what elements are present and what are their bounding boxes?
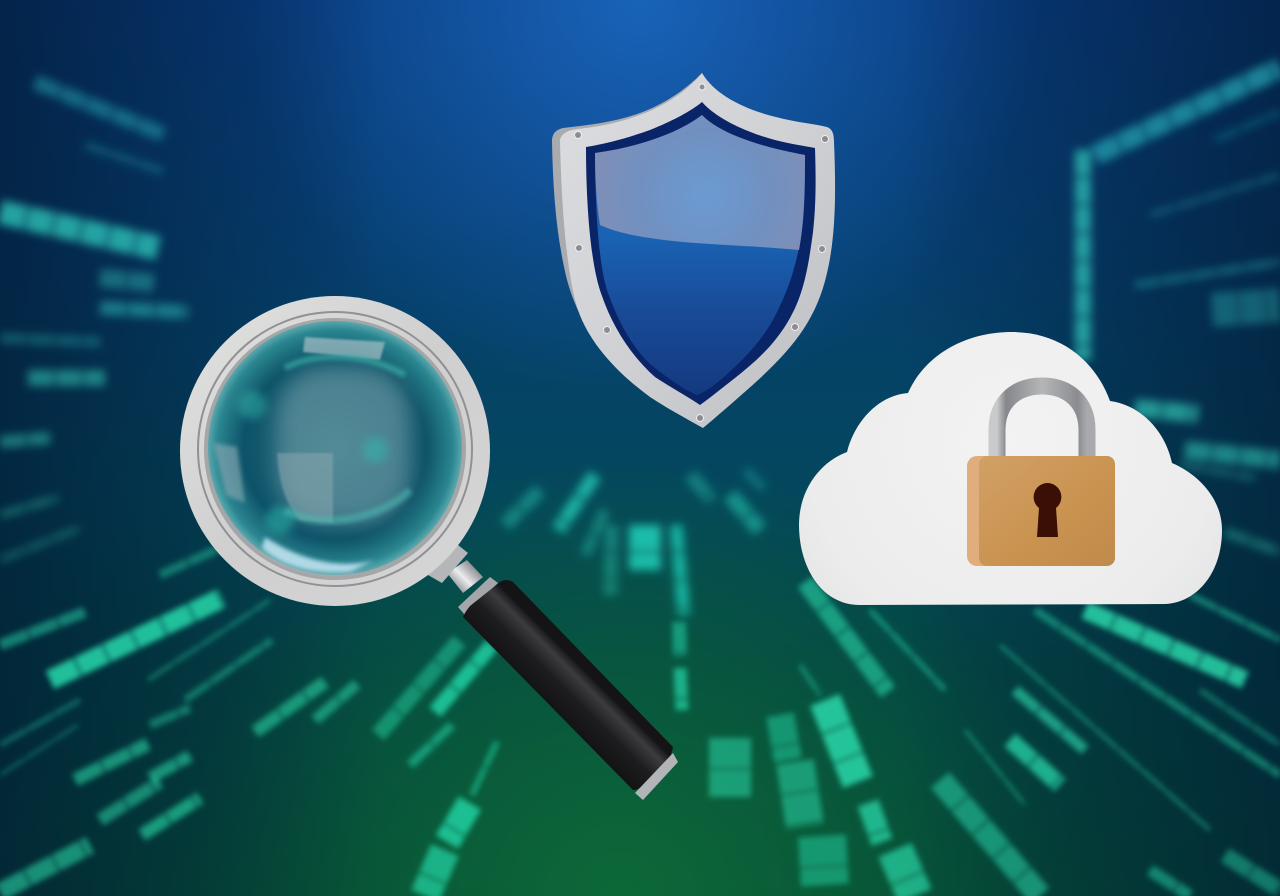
padlock keyhole xyxy=(1034,483,1061,537)
icon: magnifying glass xyxy=(180,296,678,800)
padlock side xyxy=(967,456,1007,566)
icon: shield xyxy=(552,73,835,428)
background: blurred far data streaks xyxy=(0,68,1280,615)
padlock body xyxy=(979,456,1115,566)
magnifier handle xyxy=(463,580,673,790)
shield metal frame xyxy=(560,73,835,428)
shield dark inner rim xyxy=(586,102,816,405)
shield glass lower xyxy=(595,115,805,395)
shield side bevel xyxy=(552,73,703,428)
shield glass upper highlight xyxy=(595,115,805,250)
magnifier lens xyxy=(208,321,462,575)
shield rivets xyxy=(574,84,828,422)
padlock shackle xyxy=(997,386,1087,460)
cloud xyxy=(799,332,1222,605)
icon: cloud with padlock xyxy=(799,332,1222,605)
magnifier end cap xyxy=(635,753,678,800)
background: near data streaks xyxy=(0,548,1280,896)
magnifier neck xyxy=(447,560,483,593)
magnifier flare xyxy=(428,545,468,583)
magnifier collar xyxy=(458,577,498,615)
magnifier ring xyxy=(180,296,490,606)
